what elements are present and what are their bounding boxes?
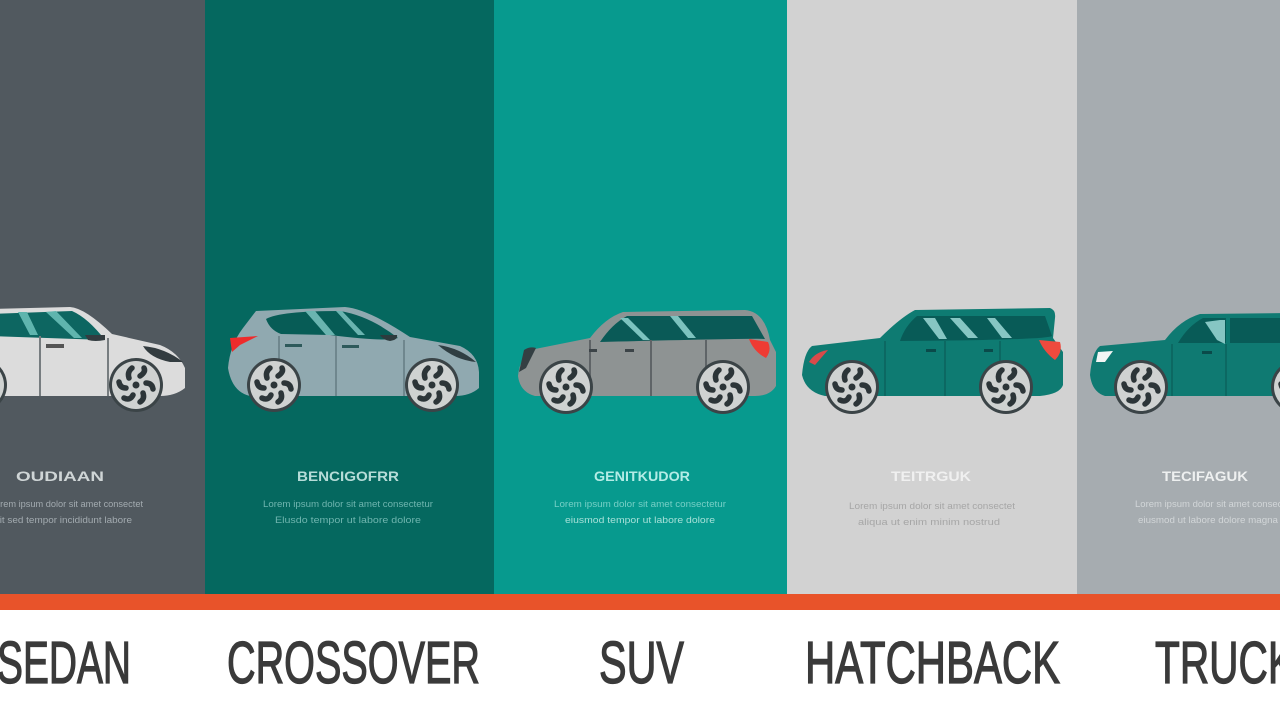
icon: teal hatchback car [802,308,1063,414]
text: hatchback description: Lorem ipsum dolor sit amet consectet [849,501,1015,512]
text: truck description: eiusmod ut labore dolore magna [1138,515,1279,526]
text: crossover description [263,499,433,526]
heading: crossover caption: BENCIGOFRR [297,468,399,484]
label: CROSSOVER: CROSSOVER [227,630,480,696]
panel: crossover [205,0,494,594]
text: hatchback description: aliqua ut enim minim nostrud [858,517,1000,528]
icon: blue-grey crossover car [228,307,479,412]
text: truck description [1135,499,1280,526]
heading: SUV caption: GENITKUDOR [594,468,690,484]
label: SEDAN: SEDAN [0,630,131,696]
text: SUV description: Lorem ipsum dolor sit amet consectetur [554,499,726,510]
panel: truck [1077,0,1280,594]
icon: grey SUV car [518,310,776,414]
text: hatchback description [849,501,1015,528]
panel: hatchback [787,0,1077,594]
panel: sedan [0,0,205,594]
icon: white sedan car [0,307,185,412]
icon: teal pickup truck [1090,313,1280,414]
label: SUV: SUV [599,630,684,696]
heading: sedan caption: OUDIAAN [16,468,104,484]
heading: truck caption: TECIFAGUK [1162,468,1248,484]
panel: SUV [494,0,787,594]
text: SUV description [554,499,726,526]
text: sedan description [0,499,143,526]
text: crossover description: Elusdo tempor ut labore dolore [275,515,421,526]
text: SUV description: eiusmod tempor ut labore dolore [565,515,715,526]
label: HATCHBACK: HATCHBACK [805,630,1060,696]
divider: orange band [0,594,1280,610]
text: crossover description: Lorem ipsum dolor sit amet consectetur [263,499,433,510]
heading: hatchback caption: TEITRGUK [891,468,971,484]
